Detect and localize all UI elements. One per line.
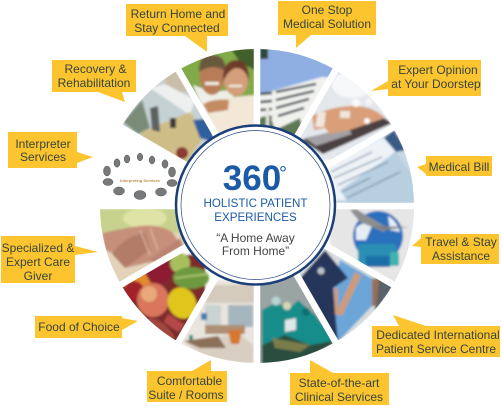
photo: rehabilitation gym (122, 72, 213, 162)
callout: food of choice: Food of Choice (38, 320, 120, 334)
callout: expert opinion: at Your Doorstep (391, 77, 481, 91)
photo: hospital building (260, 49, 333, 134)
callout: expert opinion (371, 60, 481, 96)
callout: medical bill: Medical Bill (429, 160, 489, 174)
heading: 360 degrees: 360 (223, 159, 281, 198)
callout: international patient service centre (372, 315, 500, 357)
callout: comfortable suite: Comfortable (157, 374, 222, 388)
photo: comfortable suite (182, 279, 254, 363)
photo: happy couple (181, 49, 254, 133)
subheading: holistic patient experiences: HOLISTIC PATIENT (204, 197, 307, 210)
callout: recovery: Rehabilitation (58, 76, 130, 90)
photo: medical staff (300, 248, 392, 340)
photo: caring hands (100, 209, 185, 282)
callout: comfortable suite: Suite / Rooms (148, 388, 224, 402)
callout: one stop (278, 1, 376, 48)
callout: travel and stay (412, 234, 499, 264)
callout: recovery (52, 60, 136, 102)
callout: interpreter services (8, 132, 93, 168)
photo: hands on laptop (300, 72, 391, 160)
callout: travel and stay: Assistance (432, 249, 490, 263)
callout: return home: Return Home and (131, 7, 225, 21)
photo: plane, globe and luggage (330, 209, 414, 282)
callout: travel and stay: Travel & Stay (425, 235, 497, 249)
callout: expert opinion: Expert Opinion (398, 63, 478, 77)
icon: interpreter chairs ring: Interpreting Services (120, 178, 161, 183)
callout: clinical services (290, 360, 389, 405)
callout: clinical services: State-of-the-art (299, 376, 379, 390)
photo: fruit (122, 252, 211, 340)
callout: one stop: Medical Solution (283, 17, 371, 31)
callout: recovery: Recovery & (64, 62, 127, 76)
photo: surgery team (260, 276, 333, 363)
callout: food of choice (35, 316, 138, 338)
callout: care giver (1, 236, 98, 283)
centre circle (176, 126, 335, 284)
subheading: holistic patient experiences: EXPERIENCES (214, 211, 297, 224)
callout: comfortable suite (147, 360, 227, 402)
callout: care giver: Expert Care (6, 255, 70, 269)
callout: international patient service centre: Patient Service Centre (376, 342, 496, 356)
callout: one stop: One Stop (302, 3, 352, 17)
tagline: “A Home Away (216, 231, 295, 245)
callout: return home: Stay Connected (134, 21, 220, 35)
callout: interpreter services: Interpreter (15, 137, 71, 151)
callout: clinical services: Clinical Services (295, 390, 383, 404)
tagline: From Home” (222, 244, 289, 258)
photo: medical bill (328, 130, 414, 203)
callout: care giver: Giver (24, 269, 52, 283)
callout: medical bill (417, 156, 492, 176)
callout: care giver: Specialized & (2, 241, 74, 255)
icon: interpreter chairs ring (103, 153, 177, 200)
heading: 360 degrees: ° (279, 163, 287, 185)
callout: return home (126, 4, 228, 52)
callout: international patient service centre: Dedicated International (376, 328, 500, 342)
callout: interpreter services: Services (20, 150, 66, 164)
